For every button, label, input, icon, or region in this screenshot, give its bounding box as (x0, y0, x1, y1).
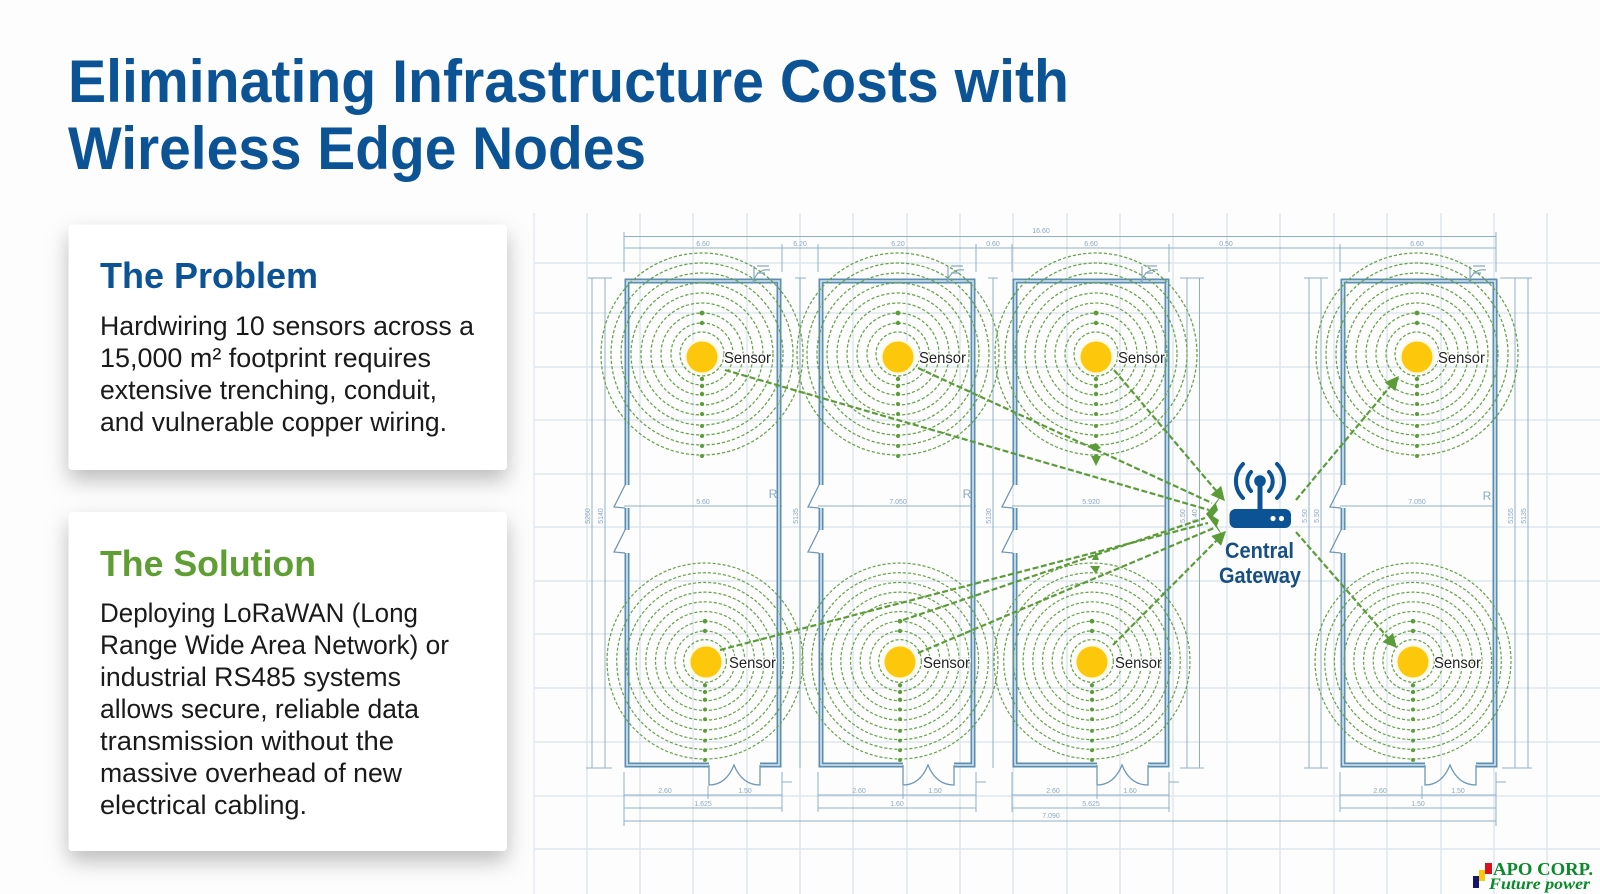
solution text: Deploying LoRaWAN (Long (100, 598, 418, 628)
floor plan dimension lines: 6.60 (1410, 241, 1424, 248)
title: Wireless Edge Nodes (68, 115, 646, 182)
problem text: 15,000 m² footprint requires (100, 343, 431, 373)
sensor node 1 (684, 339, 772, 375)
heading: the solution: The Solution (100, 543, 316, 584)
floor plan dimension lines: 7.050 (889, 499, 907, 506)
floor plan dimension lines: 2.60 (852, 788, 866, 795)
floor plan dimension lines: 5140 (598, 508, 605, 524)
blueprint grid (534, 213, 1600, 894)
sensor node 6 (882, 644, 971, 680)
floor plan dimension lines: 16.60 (1032, 228, 1050, 235)
solution text: transmission without the (100, 726, 394, 756)
sensor node 3: Sensor (1118, 350, 1166, 367)
problem text (100, 311, 475, 437)
floor plan dimension lines: 5.920 (1082, 499, 1100, 506)
floor plan dimension lines: 5.50 (1180, 509, 1187, 523)
sensor node 5: Sensor (729, 655, 777, 672)
sensor node 8 (1395, 644, 1482, 680)
sensor node 7: Sensor (1115, 655, 1163, 672)
problem text: and vulnerable copper wiring. (100, 407, 447, 437)
panel: the solution (68, 512, 507, 851)
logo: APO Corp (1473, 859, 1593, 893)
floor plan dimension lines: 2.60 (658, 788, 672, 795)
floor plan dimension lines: R (963, 487, 972, 501)
solution text (100, 598, 449, 820)
floor plan dimension lines: 6.20 (793, 241, 807, 248)
solution text: massive overhead of new (100, 758, 402, 788)
data link arrows to gateway (720, 368, 1398, 653)
floor plan dimension lines (585, 228, 1532, 826)
floor plan dimension lines: 5135 (1521, 508, 1528, 524)
sensor node 4: Sensor (1438, 350, 1486, 367)
floor plan dimension lines: 0.60 (986, 241, 1000, 248)
floor plan dimension lines: 1.50 (1451, 788, 1465, 795)
gateway label (1219, 538, 1302, 588)
gateway label: Gateway (1219, 563, 1302, 588)
solution text: industrial RS485 systems (100, 662, 401, 692)
central gateway (1219, 464, 1302, 588)
title: Eliminating Infrastructure Costs with (68, 48, 1069, 115)
floor plan dimension lines: 5155 (1508, 508, 1515, 524)
problem text: Hardwiring 10 sensors across a (100, 311, 475, 341)
solution text: Range Wide Area Network) or (100, 630, 449, 660)
floor plan dimension lines: 1.60 (1123, 788, 1137, 795)
logo: APO Corp: APO CORP. (1493, 859, 1593, 879)
floor plan dimension lines: 7.090 (1042, 813, 1060, 820)
panel: the problem (68, 224, 507, 470)
solution text: allows secure, reliable data (100, 694, 420, 724)
floor plan dimension lines: 2.60 (1373, 788, 1387, 795)
floor plan dimension lines: 1.625 (694, 801, 712, 808)
problem text: extensive trenching, conduit, (100, 375, 437, 405)
sensor node 1: Sensor (724, 350, 772, 367)
floor plan dimension lines: 2.60 (1046, 788, 1060, 795)
sensor node 6: Sensor (923, 655, 971, 672)
left fade over grid edge (526, 205, 536, 894)
sensor node 4 (1399, 339, 1486, 375)
floor plan dimension lines: 5.60 (696, 499, 710, 506)
arrowhead fan at gateway (1206, 492, 1224, 538)
signal rings (601, 253, 1518, 762)
sensor node 7 (1074, 644, 1163, 680)
floor plan dimension lines: 5130 (986, 508, 993, 524)
sensor node 2: Sensor (919, 350, 967, 367)
title (68, 48, 1069, 182)
sensor node 3 (1078, 339, 1166, 375)
floor plan: four rooms (614, 266, 1495, 785)
icon: wireless router (1230, 464, 1291, 528)
heading: the problem: The Problem (100, 255, 318, 296)
logo: APO Corp: Future power (1488, 876, 1591, 893)
floor plan dimension lines: R (769, 487, 778, 501)
sensor node 2 (880, 339, 967, 375)
floor plan dimension lines: 5.50 (1302, 509, 1309, 523)
floor plan dimension lines: 0.50 (1219, 241, 1233, 248)
floor plan dimension lines: 1.50 (1411, 801, 1425, 808)
floor plan dimension lines: 1.50 (738, 788, 752, 795)
floor plan dimension lines: 1.60 (890, 801, 904, 808)
floor plan dimension lines: 6.20 (891, 241, 905, 248)
floor plan dimension lines: 6.60 (1084, 241, 1098, 248)
floor plan dimension lines: 6.60 (696, 241, 710, 248)
sensor node 5 (688, 644, 777, 680)
floor plan dimension lines: 5135 (793, 508, 800, 524)
gateway label: Central (1225, 538, 1294, 563)
floor plan dimension lines: 5.40 (1192, 509, 1199, 523)
sensor node 8: Sensor (1434, 655, 1482, 672)
floor plan dimension lines: 5.50 (1314, 509, 1321, 523)
floor plan dimension lines: 5.625 (1082, 801, 1100, 808)
floor plan dimension lines: R (1483, 489, 1492, 503)
floor plan dimension lines: 1.50 (928, 788, 942, 795)
floor plan dimension lines: 7.050 (1408, 499, 1426, 506)
solution text: electrical cabling. (100, 790, 307, 820)
floor plan dimension lines: 5260 (585, 508, 592, 524)
